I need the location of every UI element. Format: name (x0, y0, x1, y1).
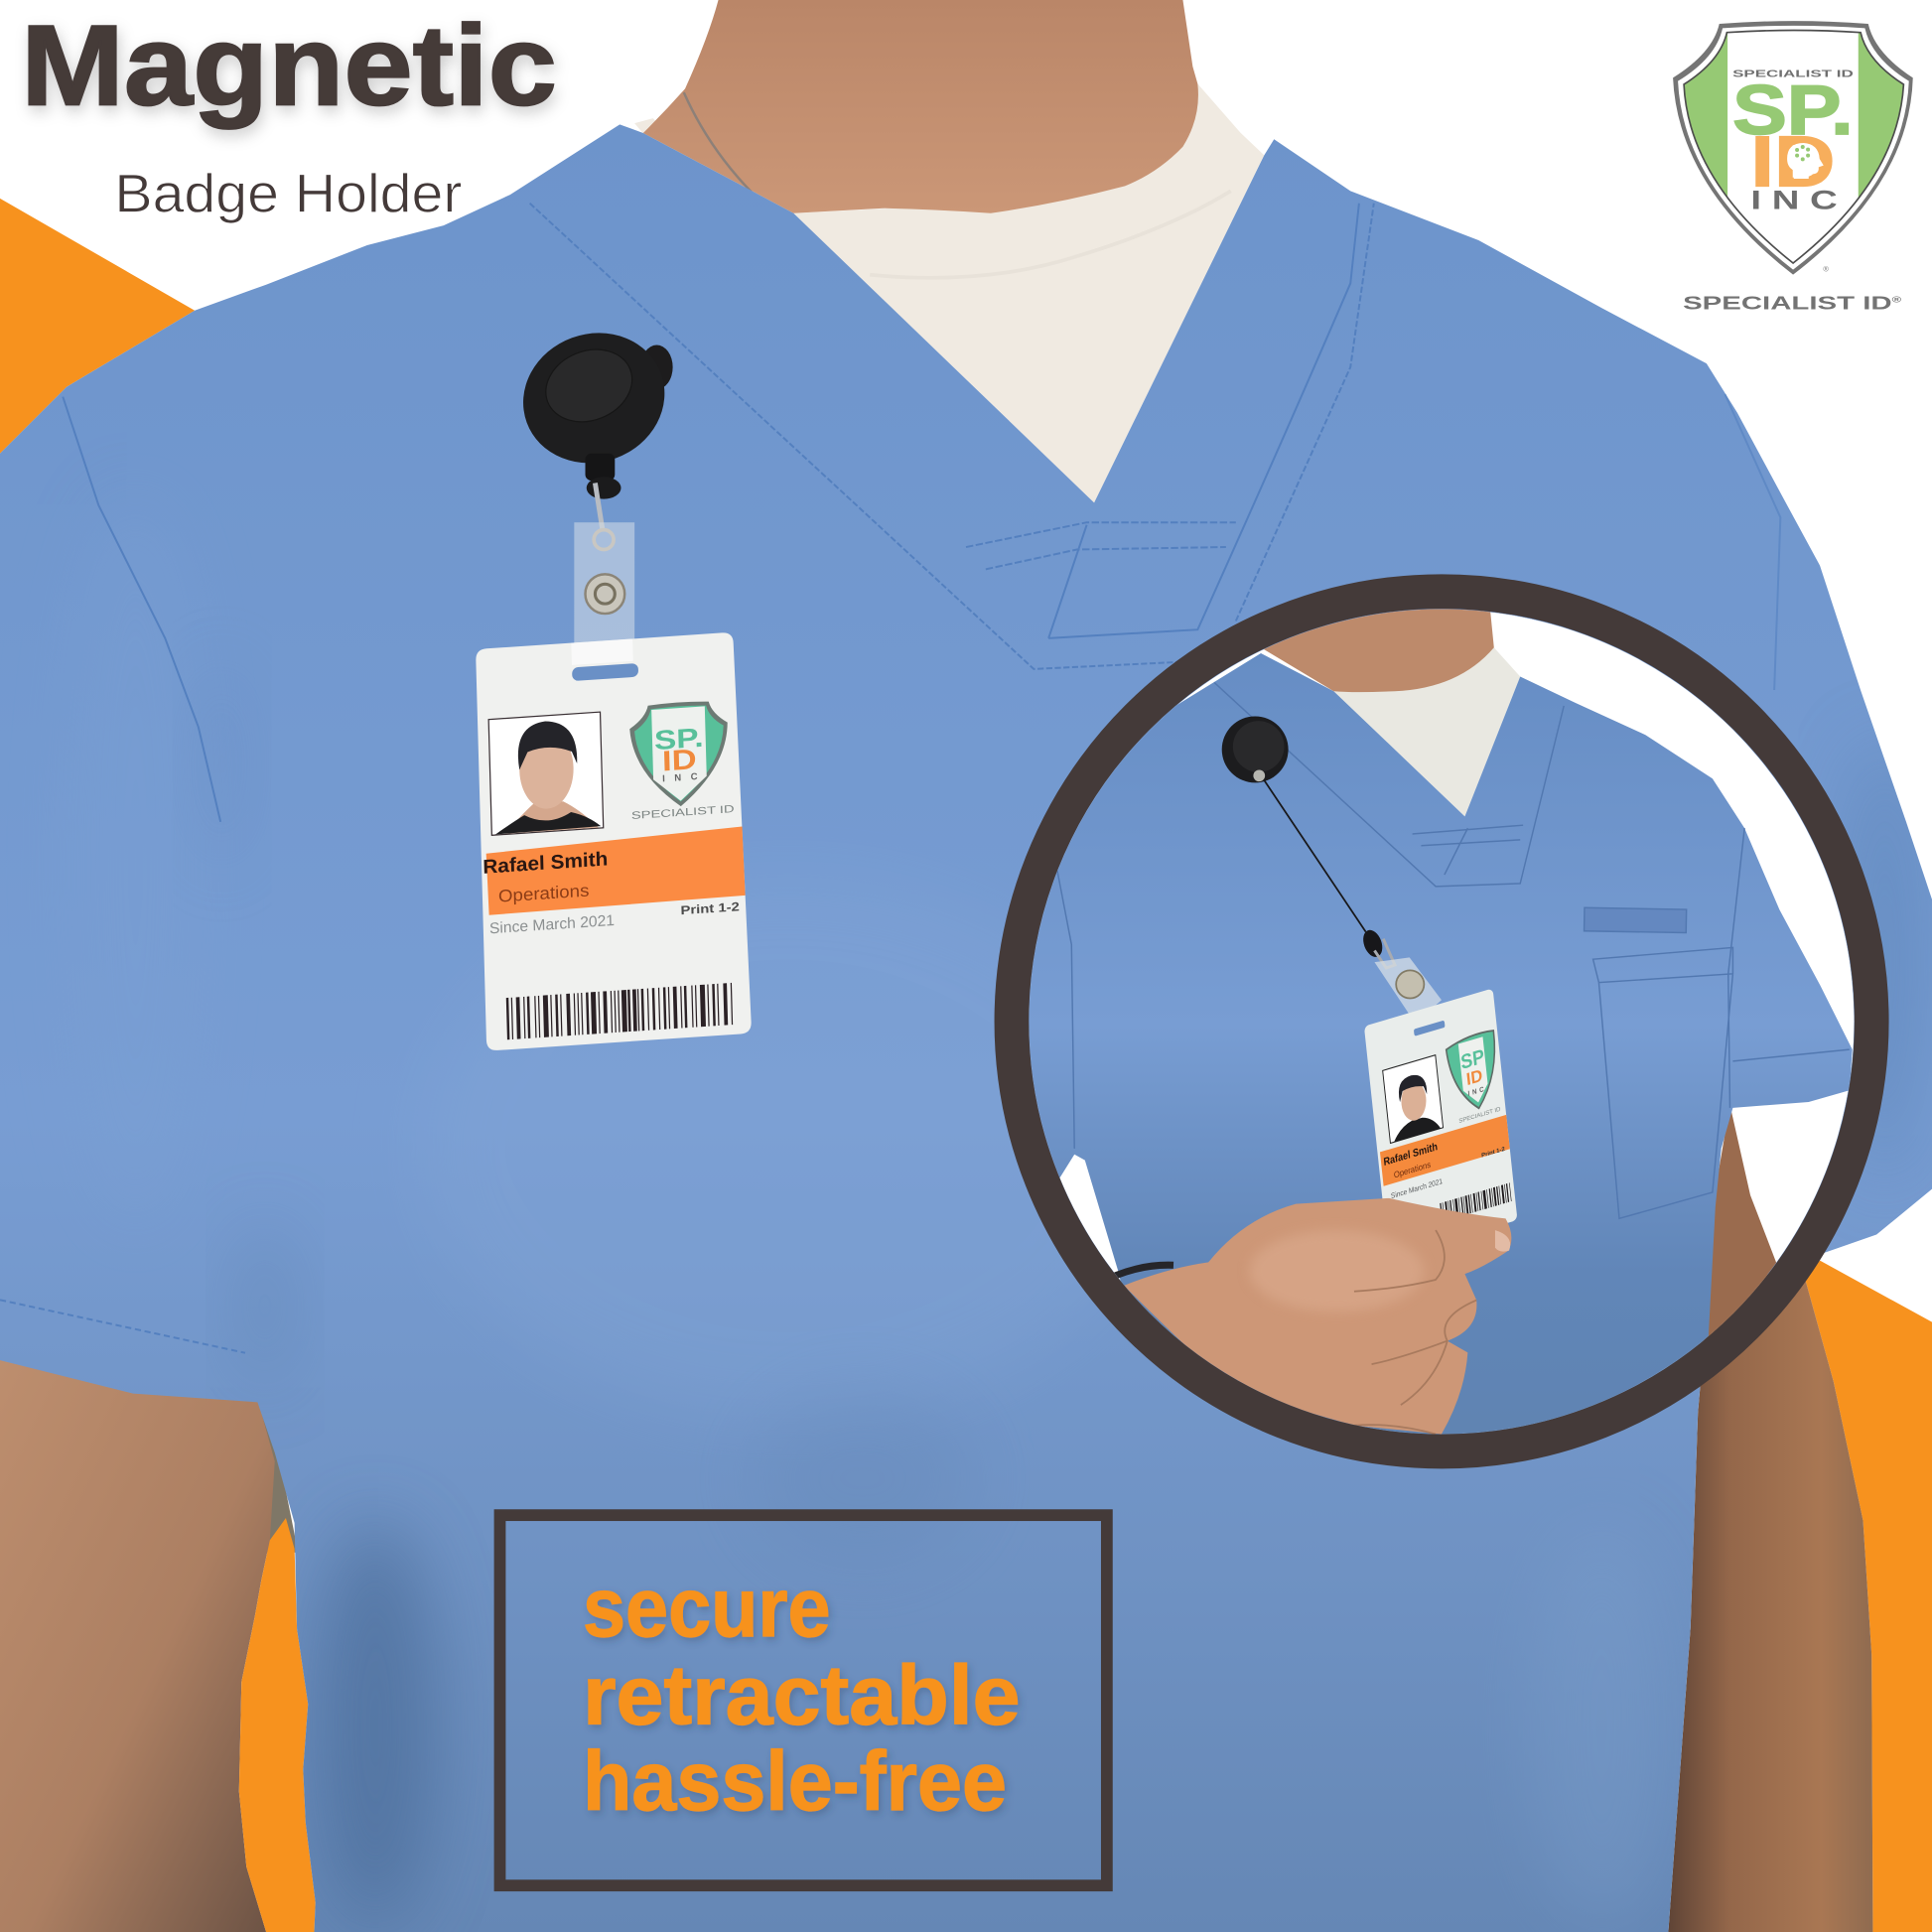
badge print label: Print 1-2 (680, 899, 740, 917)
callout text (583, 1561, 1021, 1828)
necklace (684, 92, 752, 193)
orange shape: top left (0, 199, 195, 454)
logo caption: SPECIALIST ID (1683, 293, 1813, 314)
orange shape: lower left (239, 1518, 316, 1932)
undershirt collar fold (870, 191, 1231, 278)
armpit gap (252, 1392, 298, 1553)
inset badge: Rafael Smith (1383, 1142, 1439, 1169)
badge logo: SP. (654, 722, 704, 756)
logo ID letters: ID (1750, 122, 1835, 203)
inset retracted cord (1264, 779, 1366, 932)
inset badge: ID (1465, 1066, 1483, 1089)
logo SP letters: SP. (1732, 70, 1854, 149)
logo: Specialist ID shield (1673, 21, 1913, 314)
badge logo: INC (662, 771, 698, 784)
neck (643, 0, 1198, 213)
callout text: secure (583, 1561, 830, 1654)
inset badge: Operations (1393, 1160, 1431, 1180)
inset badge: Since March 2021 (1391, 1177, 1443, 1200)
white undershirt (634, 83, 1264, 502)
callout text: retractable (583, 1648, 1021, 1741)
inset badge: INC (1467, 1086, 1484, 1098)
inset circle photo (1029, 610, 1855, 1434)
badge orange band (485, 826, 746, 915)
inset badge: Print 1-2 (1481, 1147, 1505, 1160)
inset clip (1360, 927, 1395, 968)
right arm (1668, 1108, 1872, 1932)
subtitle: Badge Holder: Badge Holder (114, 163, 462, 223)
shirt shading (62, 492, 1928, 1928)
inset shirt (993, 653, 1853, 1479)
inset badge (1364, 989, 1517, 1223)
badge slot (572, 663, 638, 681)
inset undershirt (1333, 647, 1520, 816)
inset badge: SPECIALIST ID (1458, 1106, 1501, 1125)
ID badge (476, 631, 752, 1051)
collar and seams (0, 204, 1780, 1353)
badge department: Operations (498, 880, 590, 906)
badge barcode (506, 1004, 733, 1019)
inset right arm (1708, 1112, 1777, 1336)
logo INC: I N C (1750, 186, 1838, 215)
orange shape: bottom right (1805, 1261, 1932, 1932)
logo head icon (1787, 143, 1824, 179)
logo text: SPECIALIST ID (1732, 69, 1854, 79)
inset collar and pocket (1057, 682, 1850, 1218)
inset badge reel (1222, 716, 1289, 782)
badge logo: ID (662, 744, 697, 777)
left arm (0, 1355, 275, 1932)
circle ring (1012, 592, 1871, 1451)
inset hand (1115, 1198, 1511, 1435)
inset strap (1374, 957, 1442, 1013)
callout text: hassle-free (583, 1734, 1007, 1828)
badge name: Rafael Smith (483, 848, 609, 879)
badge since date: Since March 2021 (489, 912, 615, 937)
badge photo (488, 712, 604, 835)
logo caption: ® (1892, 295, 1901, 304)
inset badge: SP (1459, 1045, 1485, 1074)
retractable badge reel (504, 314, 683, 530)
inset neck (1264, 610, 1494, 693)
clear strap with snap (574, 522, 634, 643)
badge logo (629, 699, 730, 809)
title: Magnetic: Magnetic (21, 2, 557, 129)
logo registered mark: ® (1823, 264, 1829, 273)
callout frame (500, 1515, 1107, 1885)
badge logo caption: SPECIALIST ID (631, 803, 735, 822)
